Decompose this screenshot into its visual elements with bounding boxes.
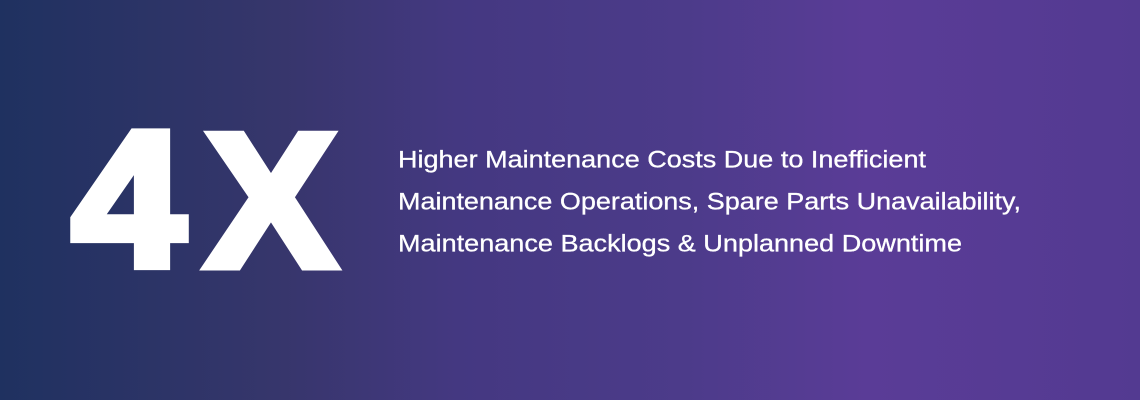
description text <box>398 146 1021 258</box>
line 2: Maintenance Operations, Spare Parts Unavailability, <box>398 188 1021 216</box>
headline: 4X <box>72 91 336 307</box>
line 1: Higher Maintenance Costs Due to Inefficient <box>398 146 926 174</box>
line 3: Maintenance Backlogs & Unplanned Downtime <box>398 230 962 258</box>
digit 4: 4 <box>72 91 185 306</box>
letter X: X <box>206 94 336 307</box>
